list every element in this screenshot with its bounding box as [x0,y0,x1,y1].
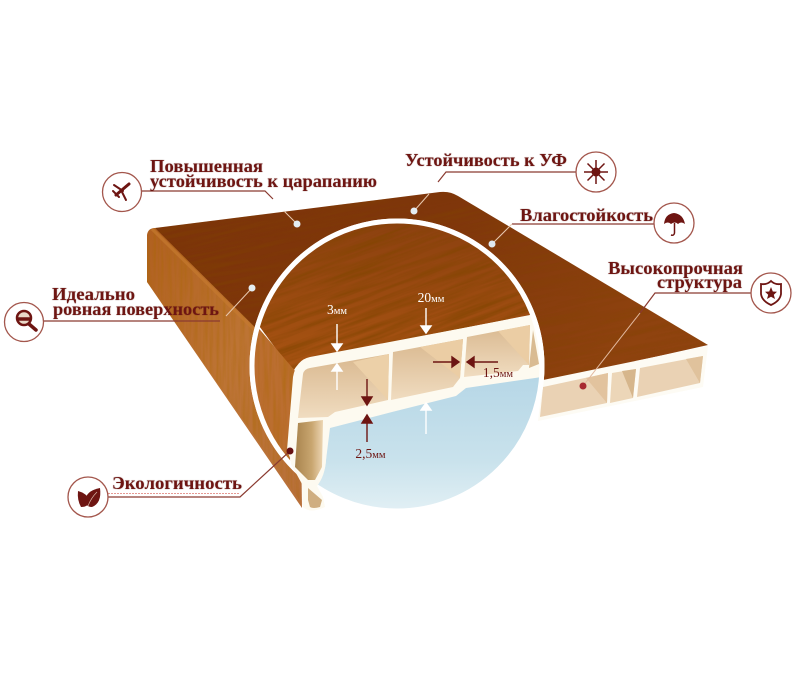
leader line [640,293,751,313]
icon: leaves [68,477,108,517]
board top surface [155,192,708,400]
callout: UV resistance [405,150,616,214]
heading: Экологичность [112,473,242,493]
icon: plane [102,172,142,212]
lens side face [254,329,295,460]
leader line [512,223,654,225]
callout: flat surface [4,284,256,342]
arrows and dimensions [327,290,513,461]
icon: sun [576,152,616,192]
white plastic profile [287,316,540,466]
dimension 1,5mm: 1,5мм [483,365,513,380]
dimension 20mm: 20мм [418,290,445,305]
heading: устойчивость к царапанию [150,171,377,191]
dimension 3mm [327,302,347,390]
blue background [318,378,539,508]
leader line [108,451,290,497]
leader line [141,191,273,199]
dimension 1,5mm [433,357,513,380]
lens background [250,220,550,520]
board bevel [152,229,300,375]
dimension 2,5mm [355,379,386,461]
callout: moisture resistance [488,203,694,248]
chamber 3 [464,325,530,377]
lens ring stroke [252,221,542,511]
narrow chamber at right [529,330,539,368]
cross section right end [538,346,708,421]
icon: shield [751,273,791,313]
dimension 3mm: 3мм [327,302,347,317]
heading: Высокопрочная [608,258,743,278]
heading [52,284,219,319]
heading [150,156,377,191]
heading: Влагостойкость [520,205,653,225]
lens wood surface [260,224,530,370]
magnified circle [250,218,544,510]
heading: Повышенная [150,156,263,176]
dimension 2,5mm: 2,5мм [355,446,386,461]
lower chamber [295,420,323,480]
callout: eco friendly [68,448,294,517]
heading: Устойчивость к УФ [405,150,567,170]
icon: umbrella [654,203,694,243]
leader line [438,172,576,182]
icon: magnifier [4,302,44,342]
chamber 2 [391,339,463,400]
nub chamber [308,488,322,508]
heading [608,258,743,292]
window sill board [147,192,708,508]
chamber 1 [298,354,389,418]
heading: Идеально [52,284,135,304]
callout: scratch resistance [102,156,377,228]
heading: ровная поверхность [53,299,219,319]
dimension 20mm [418,290,445,434]
leader line [43,320,220,322]
white lens ring [250,218,544,514]
lower profile leg and nub [288,419,329,510]
board side face [147,228,302,508]
heading: структура [657,272,742,292]
callout: high strength structure [580,258,791,390]
